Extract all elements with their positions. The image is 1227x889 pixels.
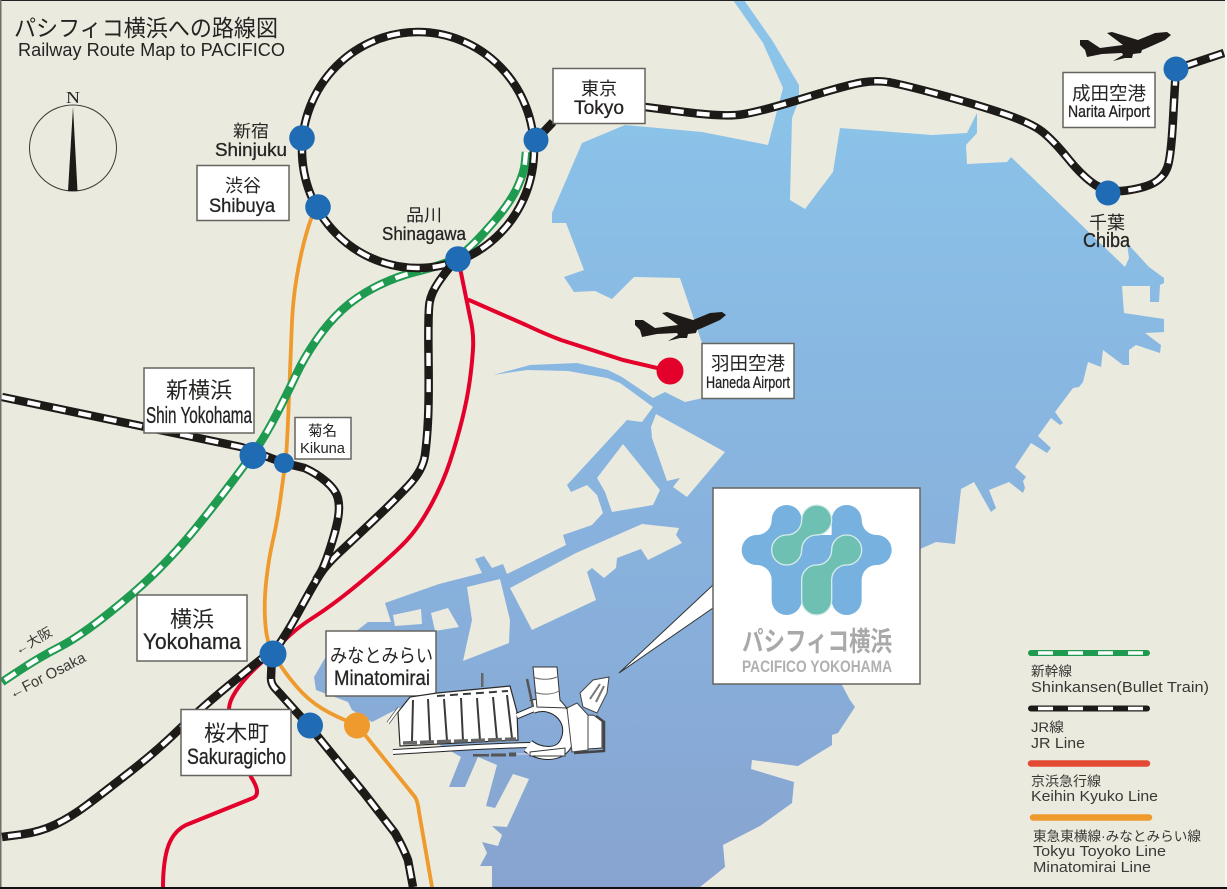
legend: Tokyu Toyoko and Minatomirai Line: Tokyu Toyoko Line — [1033, 843, 1166, 860]
legend: Shinkansen — [1030, 653, 1209, 696]
red line: Haneda branch — [469, 300, 670, 371]
legend: Tokyu Toyoko and Minatomirai Line: Minatomirai Line — [1033, 859, 1151, 876]
station: Sakuragicho: Sakuragicho — [187, 744, 286, 769]
legend: Shinkansen: Shinkansen(Bullet Train) — [1031, 679, 1209, 696]
station: Haneda Airport: Haneda Airport — [706, 373, 790, 392]
station: Minatomirai: みなとみらい — [330, 646, 433, 667]
station: Shibuya — [197, 166, 331, 220]
legend: JR Line: JR Line — [1031, 735, 1085, 752]
station: Kikuna — [274, 418, 351, 473]
red line: Keihin Kyuko south branch — [163, 653, 273, 887]
station: Kikuna: Kikuna — [300, 441, 346, 457]
direction label: Osaka — [6, 624, 89, 703]
legend: JR Line: JR線 — [1031, 720, 1065, 735]
station: Minatomirai: Minatomirai — [334, 666, 430, 690]
station: Yokohama: 横浜 — [170, 607, 214, 632]
station: Haneda Airport — [656, 344, 794, 398]
legend: Keihin Kyuko Line — [1031, 764, 1158, 805]
station: Shinagawa: 品川 — [406, 206, 442, 225]
legend: Tokyu Toyoko and Minatomirai Line — [1033, 818, 1201, 876]
station: Shinjuku: Shinjuku — [215, 139, 287, 160]
bay water — [314, 0, 1164, 887]
station: Sakuragicho — [181, 710, 323, 776]
station: Yokohama: Yokohama — [143, 629, 241, 654]
legend: Tokyu Toyoko and Minatomirai Line: 東急東横線·みなとみらい線 — [1033, 829, 1201, 844]
icon: Narita plane — [1080, 32, 1171, 61]
legend: Shinkansen: 新幹線 — [1031, 664, 1073, 679]
station: Kikuna: 菊名 — [308, 423, 337, 440]
station: Shibuya: Shibuya — [209, 195, 275, 217]
station: Tokyo: 東京 — [581, 79, 617, 99]
title — [14, 15, 285, 60]
panel: Pacifico Yokohama logo — [713, 488, 920, 684]
station: Shinjuku — [215, 122, 315, 160]
reclaimed land islands — [393, 414, 725, 661]
station: Chiba: 千葉 — [1089, 213, 1125, 233]
station: Shinagawa: Shinagawa — [382, 223, 467, 244]
Shinkansen line — [2, 152, 526, 682]
JR line: Tokaido via Shin Yokohama — [2, 397, 339, 580]
JR line: Yokohama to Sakuragicho and south — [271, 653, 413, 887]
JR line: west of Yokohama — [2, 652, 270, 837]
icon: compass: N — [66, 88, 80, 107]
legend: JR Line — [1030, 708, 1147, 752]
red line: Keihin Kyuko — [273, 258, 473, 653]
callout pointer — [619, 585, 713, 673]
building: Pacifico Yokohama — [388, 667, 609, 756]
JR line: Tokyo to Chiba and Narita — [536, 53, 1224, 191]
legend — [1030, 653, 1209, 876]
JR line: Shinagawa to Yokohama — [273, 258, 458, 653]
direction label: Osaka: ←大阪 — [12, 624, 55, 658]
logo wordmark: パシフィコ横浜 — [742, 627, 892, 657]
panel: Pacifico Yokohama logo: PACIFICO YOKOHAMA — [742, 657, 892, 676]
orange line: Tokyu Toyoko / Minatomirai — [265, 207, 432, 887]
legend: Keihin Kyuko Line: Keihin Kyuko Line — [1031, 788, 1158, 805]
station: Yokohama — [137, 595, 286, 668]
direction label: Osaka: ←For Osaka — [6, 649, 89, 703]
station: Tokyo: Tokyo — [574, 97, 624, 119]
station: Haneda Airport: 羽田空港 — [711, 353, 785, 374]
station: Narita Airport: Narita Airport — [1068, 102, 1150, 121]
station: Shibuya: 渋谷 — [225, 176, 261, 196]
logo mark — [742, 505, 892, 615]
title: パシフィコ横浜への路線図 — [14, 15, 278, 41]
title: Railway Route Map to PACIFICO — [18, 39, 285, 60]
station: Shin Yokohama: 新横浜 — [166, 378, 232, 403]
station: Narita Airport — [1063, 56, 1188, 128]
legend: Keihin Kyuko Line: 京浜急行線 — [1031, 774, 1102, 789]
station: Shin Yokohama: Shin Yokohama — [146, 402, 252, 428]
station: Chiba — [1083, 180, 1131, 252]
station: Sakuragicho: 桜木町 — [204, 721, 269, 746]
icon: compass — [30, 88, 116, 191]
station: Shin Yokohama — [144, 368, 266, 469]
station: Narita Airport: 成田空港 — [1072, 83, 1146, 104]
station: Chiba: Chiba — [1083, 230, 1131, 252]
station: Minatomirai — [326, 631, 436, 738]
icon: Haneda plane — [635, 312, 726, 341]
JR Yamanote loop — [302, 32, 534, 268]
station: Shinagawa — [382, 206, 471, 272]
station: Shinjuku: 新宿 — [233, 122, 269, 141]
station: Tokyo — [524, 68, 645, 152]
